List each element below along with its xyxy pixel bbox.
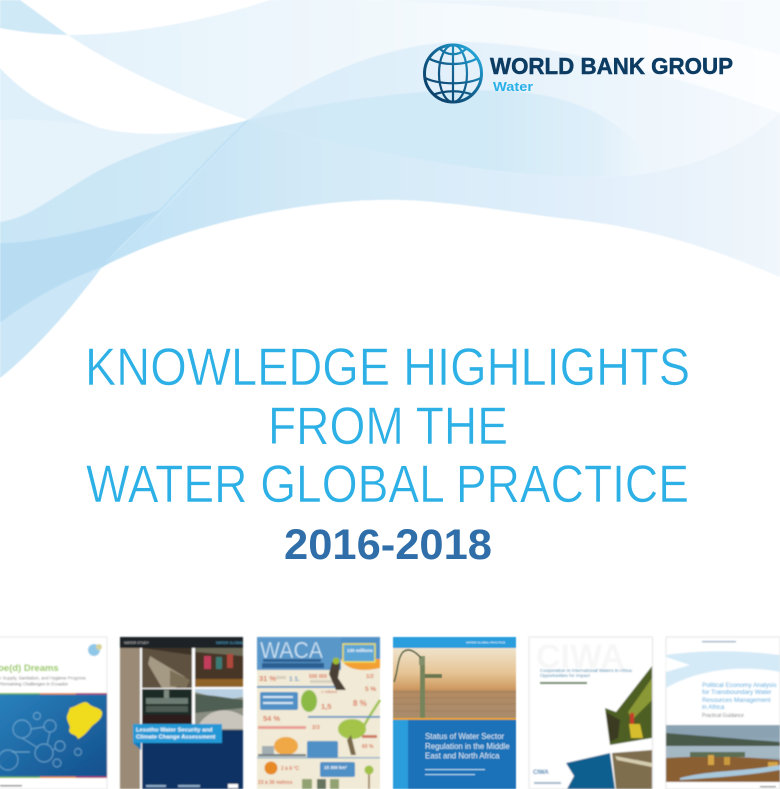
cover: Political Economy Analysis: in Africa	[702, 704, 725, 711]
cover: Lesotho Water Security	[120, 637, 243, 789]
cover: Cooperation in International Waters in Africa	[529, 637, 652, 789]
subtitle: years: 2016-2018	[284, 521, 492, 569]
cover: WACA infographic: WACA	[260, 637, 324, 663]
report covers row	[0, 637, 780, 789]
photo: dam	[142, 648, 192, 688]
title: WATER GLOBAL PRACTICE	[86, 455, 689, 514]
cover: WACA infographic: 31 %	[259, 674, 276, 683]
cover: WACA infographic	[257, 637, 380, 789]
cover: Cooperation in International Waters in Africa: Opportunities for Impact	[540, 673, 591, 678]
cover: Tapped Dreams, Ecuador: r Supply, Sanitation, and Hygiene Progress	[0, 676, 86, 680]
icon: globe	[424, 45, 482, 102]
cover: WACA infographic: 5 %	[365, 686, 376, 693]
cover: Status of Water Sector Regulation: Status of Water Sector	[425, 732, 504, 741]
cover: Cooperation in International Waters in Africa: Cooperation in International Waters in Africa:	[540, 668, 633, 673]
cover: Lesotho Water Security: Climate Change Assessment	[136, 734, 215, 740]
title	[85, 338, 690, 514]
cover: Status of Water Sector Regulation: Regulation in the Middle	[425, 742, 510, 751]
cover: WACA infographic: 130 millions	[347, 648, 373, 653]
cover: WACA infographic: 60 %	[362, 744, 374, 750]
cover: WACA infographic: 15 300 km²	[324, 765, 348, 770]
header wave graphic	[0, 0, 780, 378]
title: FROM THE	[268, 397, 508, 456]
cover: WACA infographic: 1,5	[321, 702, 331, 711]
wordmark: WORLD BANK GROUP	[490, 53, 733, 79]
cover: WACA infographic: 54 %	[263, 714, 280, 723]
sub-brand: Water: Water	[493, 79, 533, 94]
cover: Political Economy Analysis	[666, 637, 780, 789]
cover: Lesotho Water Security: WATER GLOBAL	[216, 641, 243, 645]
cover: Lesotho Water Security: WATER STUDY	[124, 641, 150, 645]
cover: Status of Water Sector Regulation: East and North Africa	[425, 752, 500, 760]
cover: Political Economy Analysis: Practical Guidance	[702, 713, 744, 719]
photo: river valley	[195, 689, 243, 730]
cover: Political Economy Analysis: for Transboundary Water	[702, 689, 771, 696]
cover: Status of Water Sector Regulation: WATER GLOBAL PRACTICE	[466, 640, 505, 644]
cover: WACA infographic: 1 milliard	[321, 689, 337, 694]
cover: WACA infographic: 1 1.	[289, 676, 300, 683]
cover: WACA infographic: 2 à 6 °C	[281, 766, 300, 772]
cover: Cooperation in International Waters in Africa: CIWA	[536, 638, 625, 676]
photo: people	[195, 648, 243, 687]
title: KNOWLEDGE HIGHLIGHTS	[85, 338, 690, 397]
cover: Lesotho Water Security: Lesotho Water Security and	[136, 728, 213, 734]
cover: Status of Water Sector Regulation	[393, 637, 516, 789]
cover: Tapped Dreams, Ecuador: Remaining Challenges in Ecuador	[0, 682, 69, 686]
cover: WACA infographic: 1/2	[366, 674, 374, 680]
cover: WACA infographic: 8 %	[353, 699, 367, 708]
cover: Cooperation in International Waters in Africa: CIWA	[533, 770, 549, 776]
cover: WACA infographic: 2/3	[312, 725, 320, 731]
cover: Political Economy Analysis: Political Economy Analysis	[702, 682, 777, 689]
cover: WACA infographic: 23 à 30 métres	[258, 780, 293, 786]
photo: assembly	[142, 689, 192, 725]
cover: WACA infographic: 500 000	[309, 674, 327, 680]
logo: World Bank Group Water	[424, 45, 733, 102]
cover: Political Economy Analysis: Resources Management	[702, 697, 771, 704]
cover: Tapped Dreams, Ecuador	[0, 637, 107, 789]
